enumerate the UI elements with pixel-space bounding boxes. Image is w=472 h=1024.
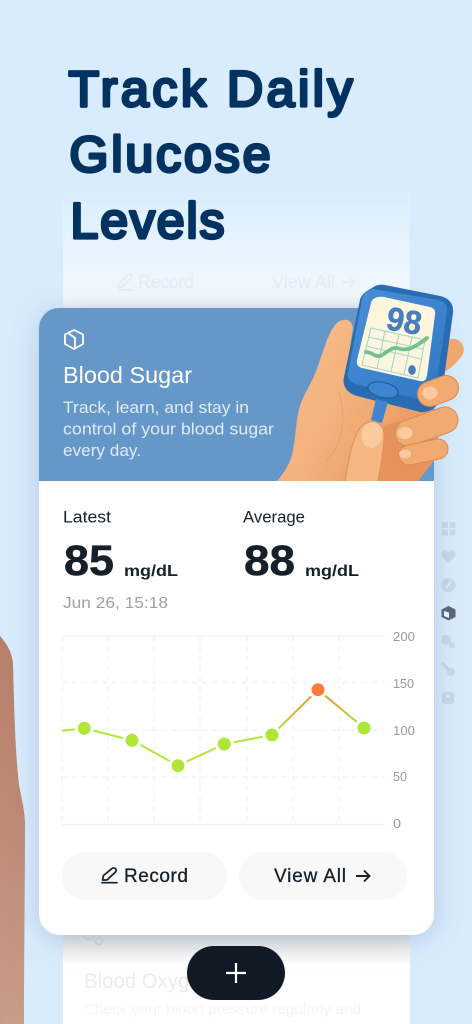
data points <box>76 682 372 774</box>
icon: dashboard <box>442 522 456 536</box>
thumb <box>345 422 384 481</box>
icon: arrow <box>356 870 370 882</box>
icon: oxygen <box>441 635 455 648</box>
title: Glucose <box>70 126 270 182</box>
average reading <box>243 508 359 585</box>
axis labels: 100 <box>393 723 415 738</box>
ghost view all button: View All <box>272 272 335 292</box>
finger photo at left edge <box>0 636 25 1024</box>
palm shading <box>378 412 440 481</box>
fingernails <box>360 386 438 458</box>
average reading: 88 <box>244 537 295 585</box>
test strip <box>371 399 388 423</box>
data line <box>62 690 364 766</box>
card heading: Blood Sugar <box>63 362 192 388</box>
latest reading: 85 <box>64 537 114 585</box>
line chart <box>62 629 415 831</box>
axis labels: 200 <box>393 629 415 644</box>
view all button <box>239 852 407 900</box>
side navigation rail <box>434 510 472 720</box>
screen drop <box>408 365 416 375</box>
add button <box>187 946 285 1000</box>
record button <box>62 852 227 900</box>
latest reading: mg/dL <box>124 563 178 580</box>
illustration: hand holding glucose meter <box>277 285 464 481</box>
average reading: Average <box>243 508 305 526</box>
ghost icon <box>84 928 102 944</box>
palm crease <box>326 392 343 462</box>
meter button <box>366 379 400 401</box>
back finger <box>440 339 464 375</box>
latest reading: Latest <box>63 508 111 526</box>
latest reading: Jun 26, 15:18 <box>63 595 168 612</box>
screen grid <box>362 328 425 378</box>
ghost description: Check your blood pressure regularly and <box>84 1001 361 1018</box>
ghost record button: Record <box>138 272 194 292</box>
icon: pen <box>102 868 117 883</box>
hand palm <box>277 320 440 481</box>
card description: Track, learn, and stay in <box>63 399 249 417</box>
axis labels: 0 <box>393 816 401 831</box>
icon: cube <box>65 330 83 349</box>
icon: gauge <box>442 578 456 592</box>
title <box>68 61 352 249</box>
card description: control of your blood sugar <box>63 420 275 438</box>
icon: scale <box>442 692 454 704</box>
axis labels <box>393 629 415 831</box>
icon: thermometer <box>443 664 455 676</box>
icon: plus <box>226 963 246 983</box>
axis labels: 150 <box>393 676 414 691</box>
screen reading: 98 <box>384 299 425 342</box>
average reading: mg/dL <box>305 563 359 580</box>
title: Track Daily <box>68 61 352 117</box>
main card <box>39 308 434 935</box>
view all button: View All <box>274 866 346 887</box>
icon: heart <box>442 550 456 563</box>
icon: blood sugar cube active <box>442 606 456 620</box>
screen trend line <box>366 338 427 356</box>
title: Levels <box>70 193 224 249</box>
meter screen <box>357 297 435 381</box>
card description <box>63 399 275 460</box>
fingers <box>408 388 446 455</box>
record button: Record <box>124 866 188 887</box>
latest reading <box>63 508 178 612</box>
panel: blue header <box>39 308 434 481</box>
axis labels: 50 <box>393 769 407 784</box>
glucose meter <box>344 285 453 423</box>
card description: every day. <box>63 442 141 460</box>
ghost heading: Blood Oxygen <box>84 970 212 993</box>
faded back panel <box>63 190 410 1024</box>
